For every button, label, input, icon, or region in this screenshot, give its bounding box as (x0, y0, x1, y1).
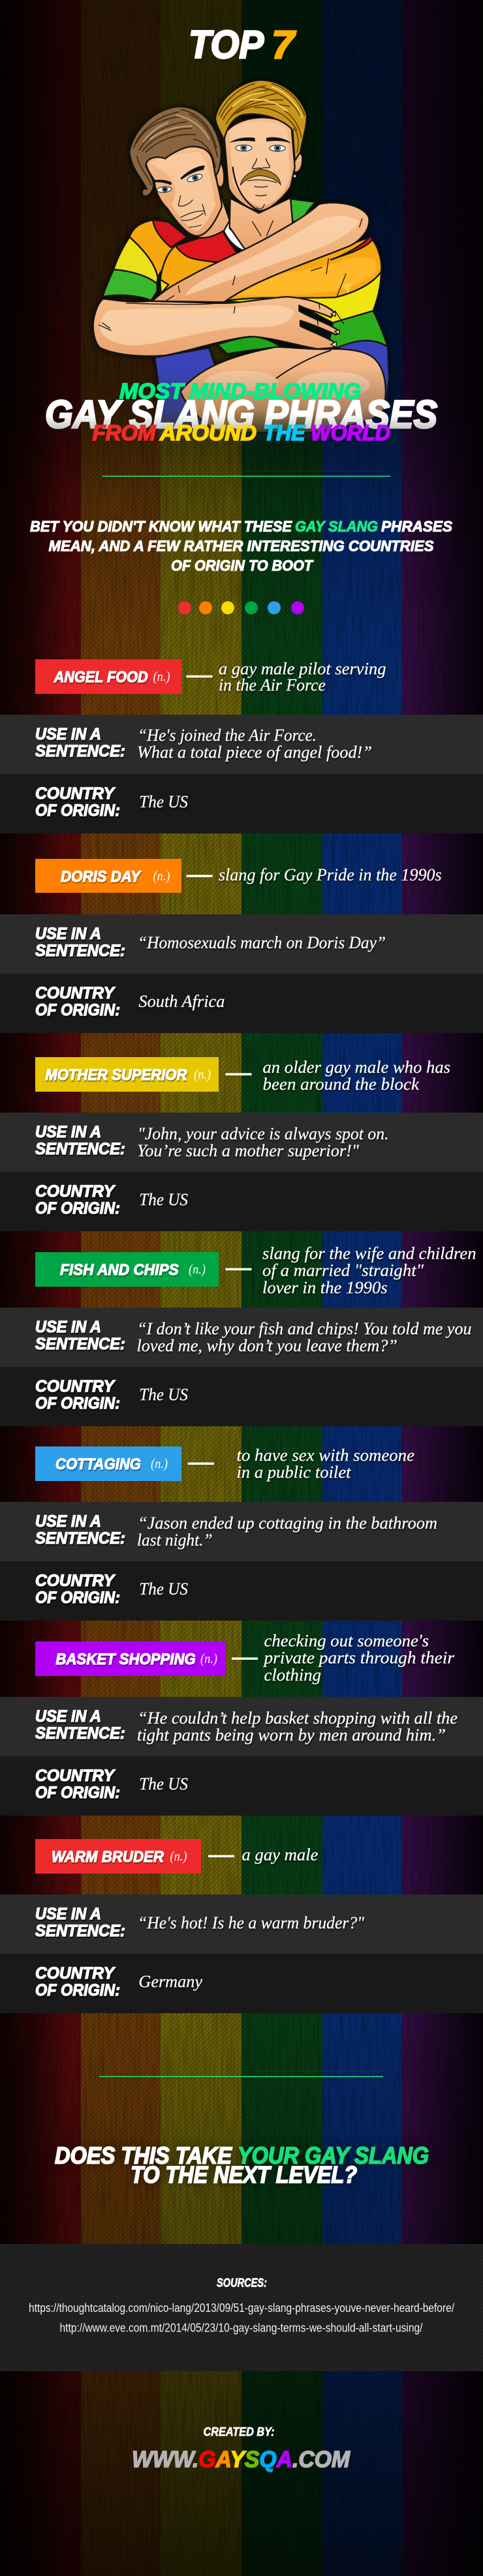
country of origin row: The US (139, 792, 188, 811)
use in a sentence row: “He couldn’t help basket shopping with all the (138, 1708, 458, 1728)
credit: created by (132, 2425, 351, 2472)
definition: checking out someone's (264, 1630, 429, 1650)
intro paragraph (30, 518, 453, 574)
panel: warm bruder (0, 1839, 483, 2013)
country of origin row: COUNTRY (35, 1572, 116, 1590)
country of origin row: OF ORIGIN: (35, 1981, 120, 1999)
use in a sentence row: SENTENCE: (35, 1922, 125, 1940)
term badge: angel food: ANGEL FOOD (54, 668, 148, 686)
use in a sentence row: SENTENCE: (35, 1529, 125, 1548)
use in a sentence row: USE IN A (35, 1905, 101, 1923)
blond man: head (215, 80, 307, 211)
back shirt: brown-haired man (102, 220, 187, 301)
country of origin row: OF ORIGIN: (35, 1199, 120, 1218)
panel: angel food (0, 659, 483, 833)
use in a sentence row: SENTENCE: (35, 1724, 125, 1743)
panel: cottaging (0, 1445, 483, 1621)
country of origin row: OF ORIGIN: (35, 1784, 120, 1802)
use in a sentence row: You’re such a mother superior!" (137, 1141, 360, 1160)
closing question: DOES THIS TAKE (55, 2142, 232, 2169)
intro paragraph: MEAN, AND A FEW RATHER INTERESTING COUNTRIES (48, 537, 434, 554)
country of origin row (0, 1756, 483, 1816)
closing question (55, 2142, 429, 2188)
definition: an older gay male who has (262, 1057, 450, 1077)
use in a sentence row: tight pants being worn by men around him.” (137, 1725, 446, 1745)
country of origin row: OF ORIGIN: (35, 1589, 120, 1607)
credit: created by: WWW.GAYSQA.COM (132, 2447, 351, 2472)
use in a sentence row: last night.” (137, 1530, 213, 1550)
term badge: doris day: DORIS DAY (61, 868, 142, 886)
definition: slang for the wife and children (262, 1243, 476, 1263)
use in a sentence row: loved me, why don’t you leave them?” (137, 1336, 397, 1355)
use in a sentence row: USE IN A (35, 1123, 101, 1141)
closing question: YOUR GAY SLANG (238, 2142, 429, 2169)
country of origin row: South Africa (138, 991, 225, 1011)
use in a sentence row (0, 1308, 483, 1367)
definition: in the Air Force (219, 675, 326, 695)
term badge: fish and chips: (n.) (189, 1261, 206, 1277)
subtitle: most mind-blowing gay slang phrases from around the world (45, 379, 437, 445)
panel: sources: SOURCES: (217, 2276, 267, 2289)
term badge: basket shopping (35, 1641, 225, 1676)
subtitle: most mind-blowing gay slang phrases from around the world: GAY SLANG PHRASES (45, 393, 437, 436)
illustration: two men embracing in rainbow shirts (93, 80, 389, 443)
definition (236, 1445, 414, 1482)
use in a sentence row: SENTENCE: (35, 942, 125, 960)
intro paragraph: BET YOU DIDN'T KNOW WHAT THESE (30, 518, 292, 535)
use in a sentence row: What a total piece of angel food!” (137, 742, 372, 762)
use in a sentence row: SENTENCE: (35, 1335, 125, 1353)
divider line (99, 2076, 383, 2077)
definition: in a public toilet (236, 1462, 351, 1482)
use in a sentence row (0, 1895, 483, 1954)
term badge: mother superior (35, 1057, 219, 1092)
term badge: warm bruder (35, 1839, 201, 1874)
country of origin row: The US (139, 1190, 188, 1209)
subtitle: most mind-blowing gay slang phrases from around the world: THE (264, 421, 305, 445)
brown-haired man: upper arm over shoulder (152, 203, 369, 302)
definition (262, 1243, 476, 1297)
term badge: basket shopping: BASKET SHOPPING (55, 1651, 196, 1668)
title: top 7: 7 (272, 23, 296, 67)
definition: slang for Gay Pride in the 1990s (219, 865, 442, 884)
front shirt: blond man rainbow torso (160, 198, 389, 406)
term badge: warm bruder: WARM BRUDER (52, 1848, 164, 1866)
connector dash (187, 875, 213, 877)
term badge: cottaging (35, 1446, 181, 1481)
subtitle: most mind-blowing gay slang phrases from around the world: FROM (93, 421, 157, 445)
country of origin row (0, 774, 483, 833)
use in a sentence row (0, 1502, 483, 1561)
term badge: cottaging: COTTAGING (55, 1456, 141, 1473)
definition: clothing (264, 1665, 321, 1685)
country of origin row (0, 1367, 483, 1426)
panel: fish and chips (0, 1243, 483, 1426)
subtitle: most mind-blowing gay slang phrases from around the world: AROUND (159, 421, 257, 445)
country of origin row (0, 1172, 483, 1231)
country of origin row: The US (139, 1774, 188, 1793)
use in a sentence row: “Jason ended up cottaging in the bathroom (138, 1513, 437, 1533)
term badge: doris day: (n.) (153, 868, 170, 884)
country of origin row: COUNTRY (35, 984, 116, 1002)
blond man: crossed lower arm (181, 347, 386, 432)
use in a sentence row (0, 715, 483, 774)
brown-haired man: arm and hand wrapped around chest (93, 297, 339, 356)
subtitle: most mind-blowing gay slang phrases from around the world: WORLD (311, 421, 390, 445)
term badge: cottaging: (n.) (151, 1456, 168, 1471)
definition: lover in the 1990s (262, 1278, 388, 1297)
use in a sentence row (0, 1697, 483, 1756)
use in a sentence row: SENTENCE: (35, 1140, 125, 1158)
title: top 7: TOP (189, 23, 264, 67)
use in a sentence row: USE IN A (35, 925, 101, 943)
definition: to have sex with someone (236, 1445, 414, 1465)
use in a sentence row: “I don’t like your fish and chips! You told me you (137, 1319, 471, 1338)
intro paragraph: OF ORIGIN TO BOOT (171, 557, 314, 574)
connector dash (188, 1462, 214, 1465)
definition: a gay male (242, 1844, 319, 1864)
country of origin row (0, 1561, 483, 1621)
country of origin row: COUNTRY (35, 1964, 116, 1983)
use in a sentence row: SENTENCE: (35, 742, 125, 760)
intro paragraph: GAY SLANG (295, 518, 378, 535)
lower shirt: blue and purple hem (155, 348, 328, 443)
use in a sentence row: "John, your advice is always spot on. (138, 1124, 389, 1143)
country of origin row: COUNTRY (35, 785, 116, 803)
term badge: warm bruder: (n.) (170, 1848, 187, 1864)
term badge: angel food (35, 659, 181, 694)
term badge: doris day (35, 859, 181, 893)
use in a sentence row: USE IN A (35, 1512, 101, 1531)
country of origin row: COUNTRY (35, 1182, 116, 1201)
definition: private parts through their (262, 1647, 455, 1667)
use in a sentence row (0, 1113, 483, 1172)
panel: sources (0, 2244, 483, 2371)
country of origin row (0, 1954, 483, 2013)
credit: created by: CREATED BY: (204, 2425, 274, 2438)
term badge: mother superior: (n.) (194, 1066, 211, 1082)
connector dash (187, 676, 213, 678)
brown-haired man: head (129, 106, 230, 238)
definition (262, 1057, 450, 1094)
country of origin row: OF ORIGIN: (35, 1394, 120, 1413)
country of origin row (0, 974, 483, 1033)
country of origin row: OF ORIGIN: (35, 801, 120, 820)
term badge: fish and chips (35, 1252, 219, 1287)
use in a sentence row: USE IN A (35, 1707, 101, 1726)
divider line (102, 476, 390, 477)
connector dash (208, 1855, 234, 1857)
use in a sentence row: USE IN A (35, 725, 101, 743)
term badge: angel food: (n.) (153, 668, 170, 684)
definition (262, 1630, 455, 1685)
country of origin row: COUNTRY (35, 1377, 116, 1396)
connector dash (226, 1073, 252, 1075)
panel: doris day (0, 859, 483, 1033)
use in a sentence row: USE IN A (35, 1318, 101, 1336)
definition: been around the block (262, 1074, 420, 1094)
country of origin row: OF ORIGIN: (35, 1001, 120, 1019)
connector dash (232, 1658, 258, 1660)
definition: a gay male pilot serving (219, 659, 386, 678)
subtitle: most mind-blowing gay slang phrases from around the world: MOST MIND-BLOWING (119, 379, 361, 403)
country of origin row: Germany (138, 1971, 202, 1991)
use in a sentence row: “Homosexuals march on Doris Day” (138, 933, 386, 952)
term badge: basket shopping: (n.) (200, 1651, 217, 1666)
definition: of a married "straight" (262, 1260, 424, 1280)
term badge: mother superior: MOTHER SUPERIOR (45, 1066, 187, 1084)
term badge: fish and chips: FISH AND CHIPS (60, 1261, 179, 1279)
rainbow dots (178, 601, 304, 614)
use in a sentence row (0, 914, 483, 974)
closing question: TO THE NEXT LEVEL? (131, 2161, 357, 2188)
panel: sources: http://www.eve.com.mt/2014/05/23/10-gay-slang-terms-we-should-all-start-using/ (60, 2322, 423, 2335)
intro paragraph: PHRASES (381, 518, 453, 535)
country of origin row: The US (139, 1579, 188, 1598)
use in a sentence row: “He's joined the Air Force. (138, 725, 317, 745)
panel: mother superior (0, 1057, 483, 1231)
connector dash (226, 1268, 252, 1270)
definition (219, 659, 386, 695)
panel: basket shopping (0, 1630, 483, 1816)
use in a sentence row: “He's hot! Is he a warm bruder?" (138, 1913, 365, 1932)
country of origin row: The US (139, 1385, 188, 1404)
country of origin row: COUNTRY (35, 1767, 116, 1785)
